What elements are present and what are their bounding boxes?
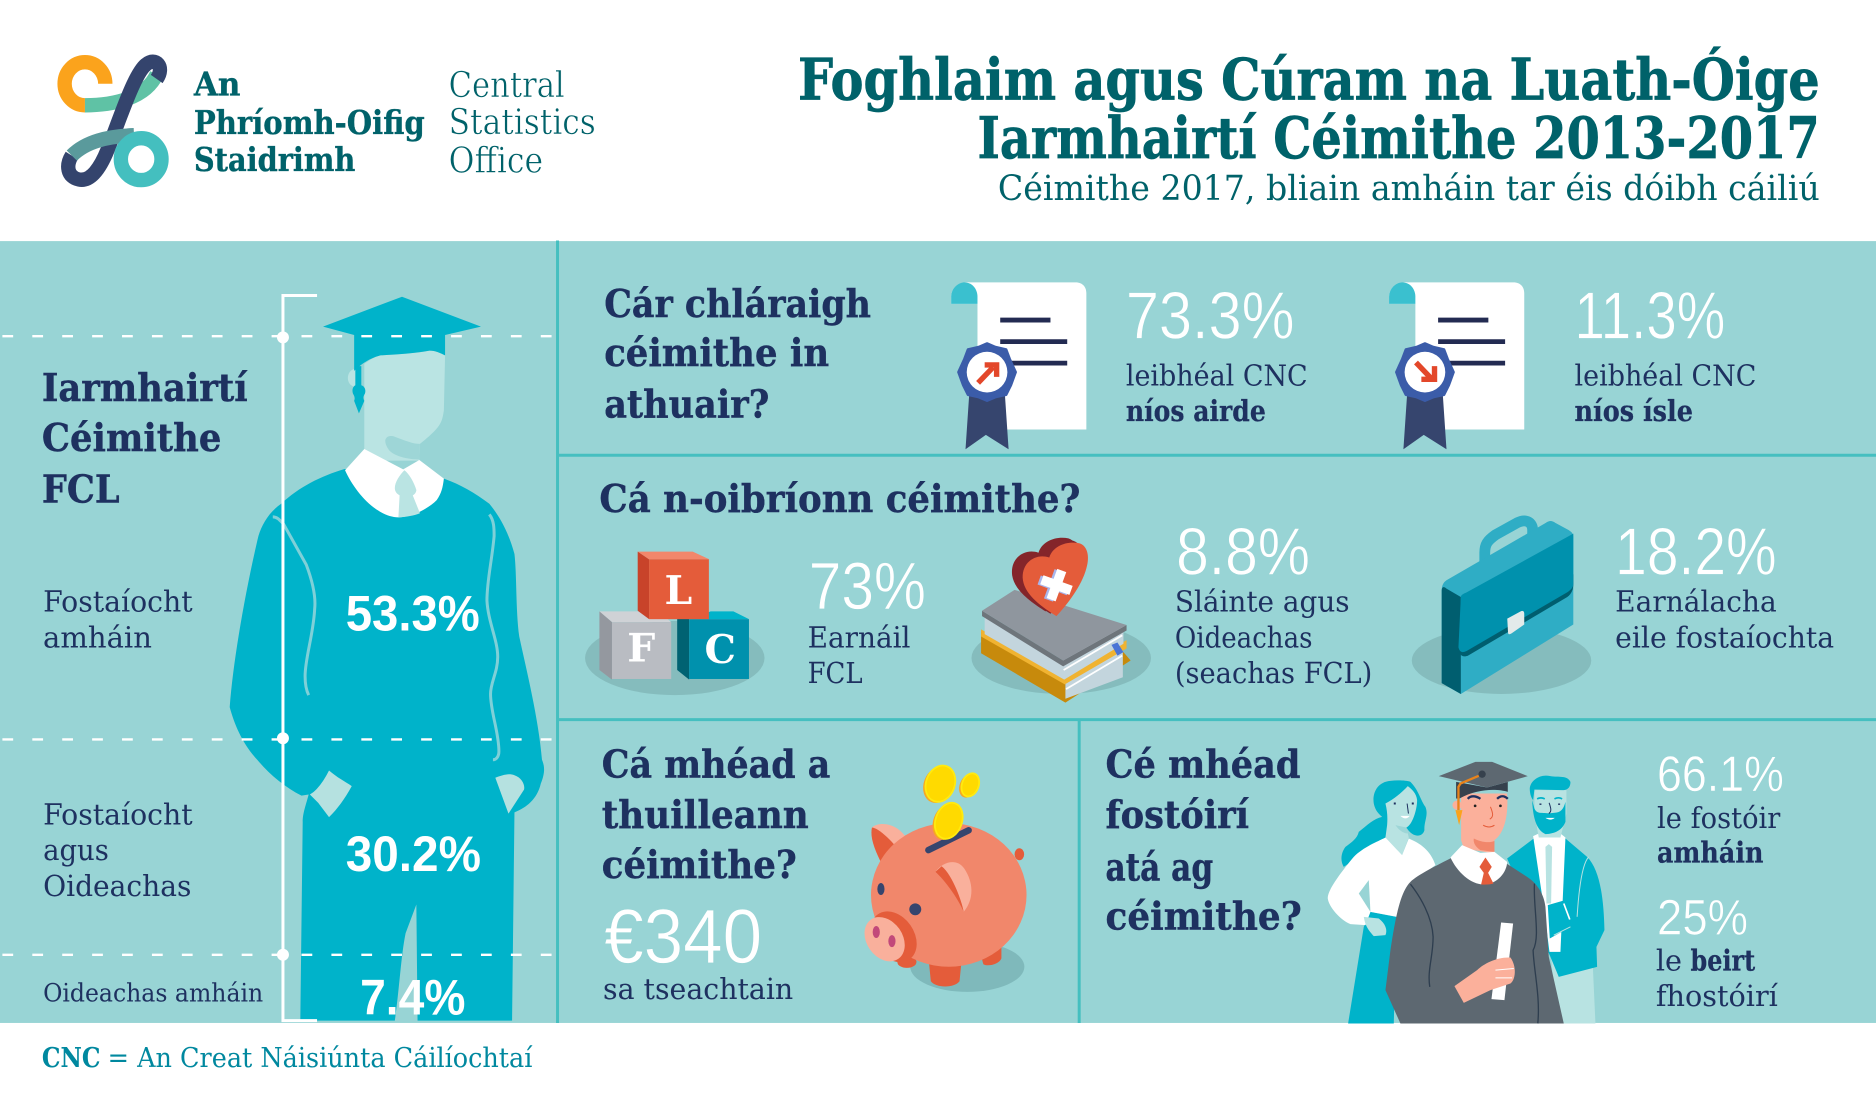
labels: outcome categories: Oideachas amháin (43, 978, 263, 1007)
heading: earnings: thuilleann (602, 793, 809, 838)
stat: 73.3% higher: leibhéal CNC (1126, 358, 1308, 392)
stat: 66.1% one employer (1657, 746, 1784, 870)
stat: 25% two employers: 25% (1657, 889, 1748, 945)
main teal panel (0, 241, 1876, 1023)
heading: enrolment: Cár chláraigh (604, 282, 871, 327)
stat: 8.8% health and education (1175, 514, 1372, 690)
panel: where do graduates work (585, 477, 1834, 703)
icon: letter blocks: L (664, 568, 692, 614)
title (798, 45, 1820, 209)
stat: 66.1% one employer: le fostóir (1657, 801, 1781, 835)
heading: graduate outcomes: FCL (42, 468, 120, 513)
stat: 30.2%: 30.2% (346, 826, 481, 882)
stat: 73.3% higher: 73.3% (1126, 279, 1295, 354)
icon: briefcase (1412, 521, 1591, 694)
stat: 73.3% higher: níos airde (1126, 394, 1266, 428)
header (65, 45, 1820, 209)
stat: 25% two employers: beirt (1691, 943, 1756, 977)
title: Céimithe 2017, bliain amháin tar éis dóibh cáiliú (998, 169, 1820, 209)
icon: piggy bank (856, 761, 1027, 992)
labels: outcome categories: Fostaíocht (43, 584, 193, 618)
heading: enrolment: céimithe in (604, 331, 829, 376)
stat: 11.3% lower: níos ísle (1574, 394, 1693, 428)
logo text Irish (193, 66, 425, 179)
stat: 25% two employers (1656, 889, 1779, 1013)
heading: enrolment (604, 282, 871, 428)
stat: 11.3% lower: 11.3% (1574, 279, 1725, 354)
heading: earnings: Cá mhéad a (602, 743, 830, 788)
stat: 73% ECE sector: FCL (808, 656, 863, 690)
stat: 8.8% health and education: Oideachas (1175, 620, 1312, 654)
panel dividers (558, 240, 1876, 1023)
icon: letter blocks: F (627, 626, 655, 672)
heading: work: Cá n-oibríonn céimithe? (599, 477, 1080, 522)
stat: 340 euro per week: sa tseachtain (603, 972, 793, 1006)
stat: 340 euro per week (603, 895, 793, 1006)
icon: letter blocks (585, 552, 765, 695)
labels: outcome categories: Fostaíocht (43, 797, 193, 831)
heading: employers: atá ag (1106, 846, 1213, 891)
graduate (1385, 762, 1564, 1024)
logo text English: Statistics (449, 102, 596, 143)
stat: 73.3% higher (1126, 279, 1308, 428)
stat: 25% two employers: le (1656, 943, 1682, 977)
stat: 25% two employers: fhostóirí (1656, 979, 1779, 1013)
logo text Irish: Staidrimh (194, 141, 355, 179)
stat: 340 euro per week: €340 (604, 895, 762, 980)
panel: number of employers (1106, 743, 1784, 1024)
heading: enrolment: athuair? (604, 383, 769, 428)
stat: 53.3%: 53.3% (346, 586, 480, 642)
logo text English: Central (449, 65, 565, 106)
footnote: CNC (42, 1042, 100, 1074)
stat: 73% ECE sector (808, 549, 926, 690)
stat: 8.8% health and education: 8.8% (1176, 514, 1310, 589)
heading: employers: céimithe? (1106, 895, 1302, 940)
heading: earnings (602, 743, 830, 888)
woman (1328, 780, 1435, 1024)
stat: 8.8% health and education: (seachas FCL) (1175, 656, 1372, 690)
logo text Irish: An (193, 66, 240, 104)
logo text Irish: Phríomh-Oifig (194, 104, 425, 142)
heading: graduate outcomes: Iarmhairtí (42, 366, 248, 411)
labels: outcome categories (43, 584, 263, 1007)
footnote: = An Creat Náisiúnta Cáilíochtaí (108, 1042, 533, 1074)
labels: outcome categories: amháin (43, 620, 152, 654)
illustration: graduate with employers (1328, 762, 1604, 1024)
stat: 66.1% one employer: 66.1% (1657, 746, 1784, 802)
heading: graduate outcomes: Céimithe (42, 416, 221, 461)
heading: employers (1106, 743, 1302, 940)
stat: 73% ECE sector: 73% (809, 549, 926, 624)
panel: graduate outcomes (2, 296, 556, 1026)
labels: outcome categories: agus (43, 833, 109, 867)
logo icon (65, 62, 162, 180)
stat: 66.1% one employer: amháin (1657, 836, 1764, 870)
stat: 11.3% lower: leibhéal CNC (1574, 358, 1756, 392)
bearded man (1507, 776, 1604, 1024)
logo text English: Office (449, 140, 543, 181)
heading: employers: fostóirí (1106, 793, 1249, 838)
figure: graduate silhouette (230, 297, 544, 1021)
heading: earnings: céimithe? (602, 843, 797, 888)
labels: outcome categories: Oideachas (43, 869, 191, 903)
icon: certificate up (951, 282, 1086, 449)
icon: books and heart (972, 538, 1151, 703)
stat: 7.4%: 7.4% (360, 970, 465, 1026)
panel: where did graduates enrol (604, 279, 1756, 449)
stat: 8.8% health and education: Sláinte agus (1175, 584, 1350, 618)
panel: earnings (602, 743, 1027, 1006)
logo text English (449, 65, 596, 181)
scale bracket (277, 296, 317, 1021)
stat: 73% ECE sector: Earnáil (808, 620, 910, 654)
stat: 11.3% lower (1574, 279, 1756, 428)
heading: graduate outcomes (42, 366, 248, 513)
icon: certificate down (1389, 282, 1524, 449)
stat: 18.2% other employment: Earnálacha (1615, 584, 1777, 618)
stat: 18.2% other employment (1615, 514, 1834, 654)
stat: 18.2% other employment: eile fostaíochta (1615, 620, 1834, 654)
icon: letter blocks: C (705, 627, 736, 673)
heading: employers: Cé mhéad (1106, 743, 1301, 788)
stat: 18.2% other employment: 18.2% (1615, 514, 1777, 589)
